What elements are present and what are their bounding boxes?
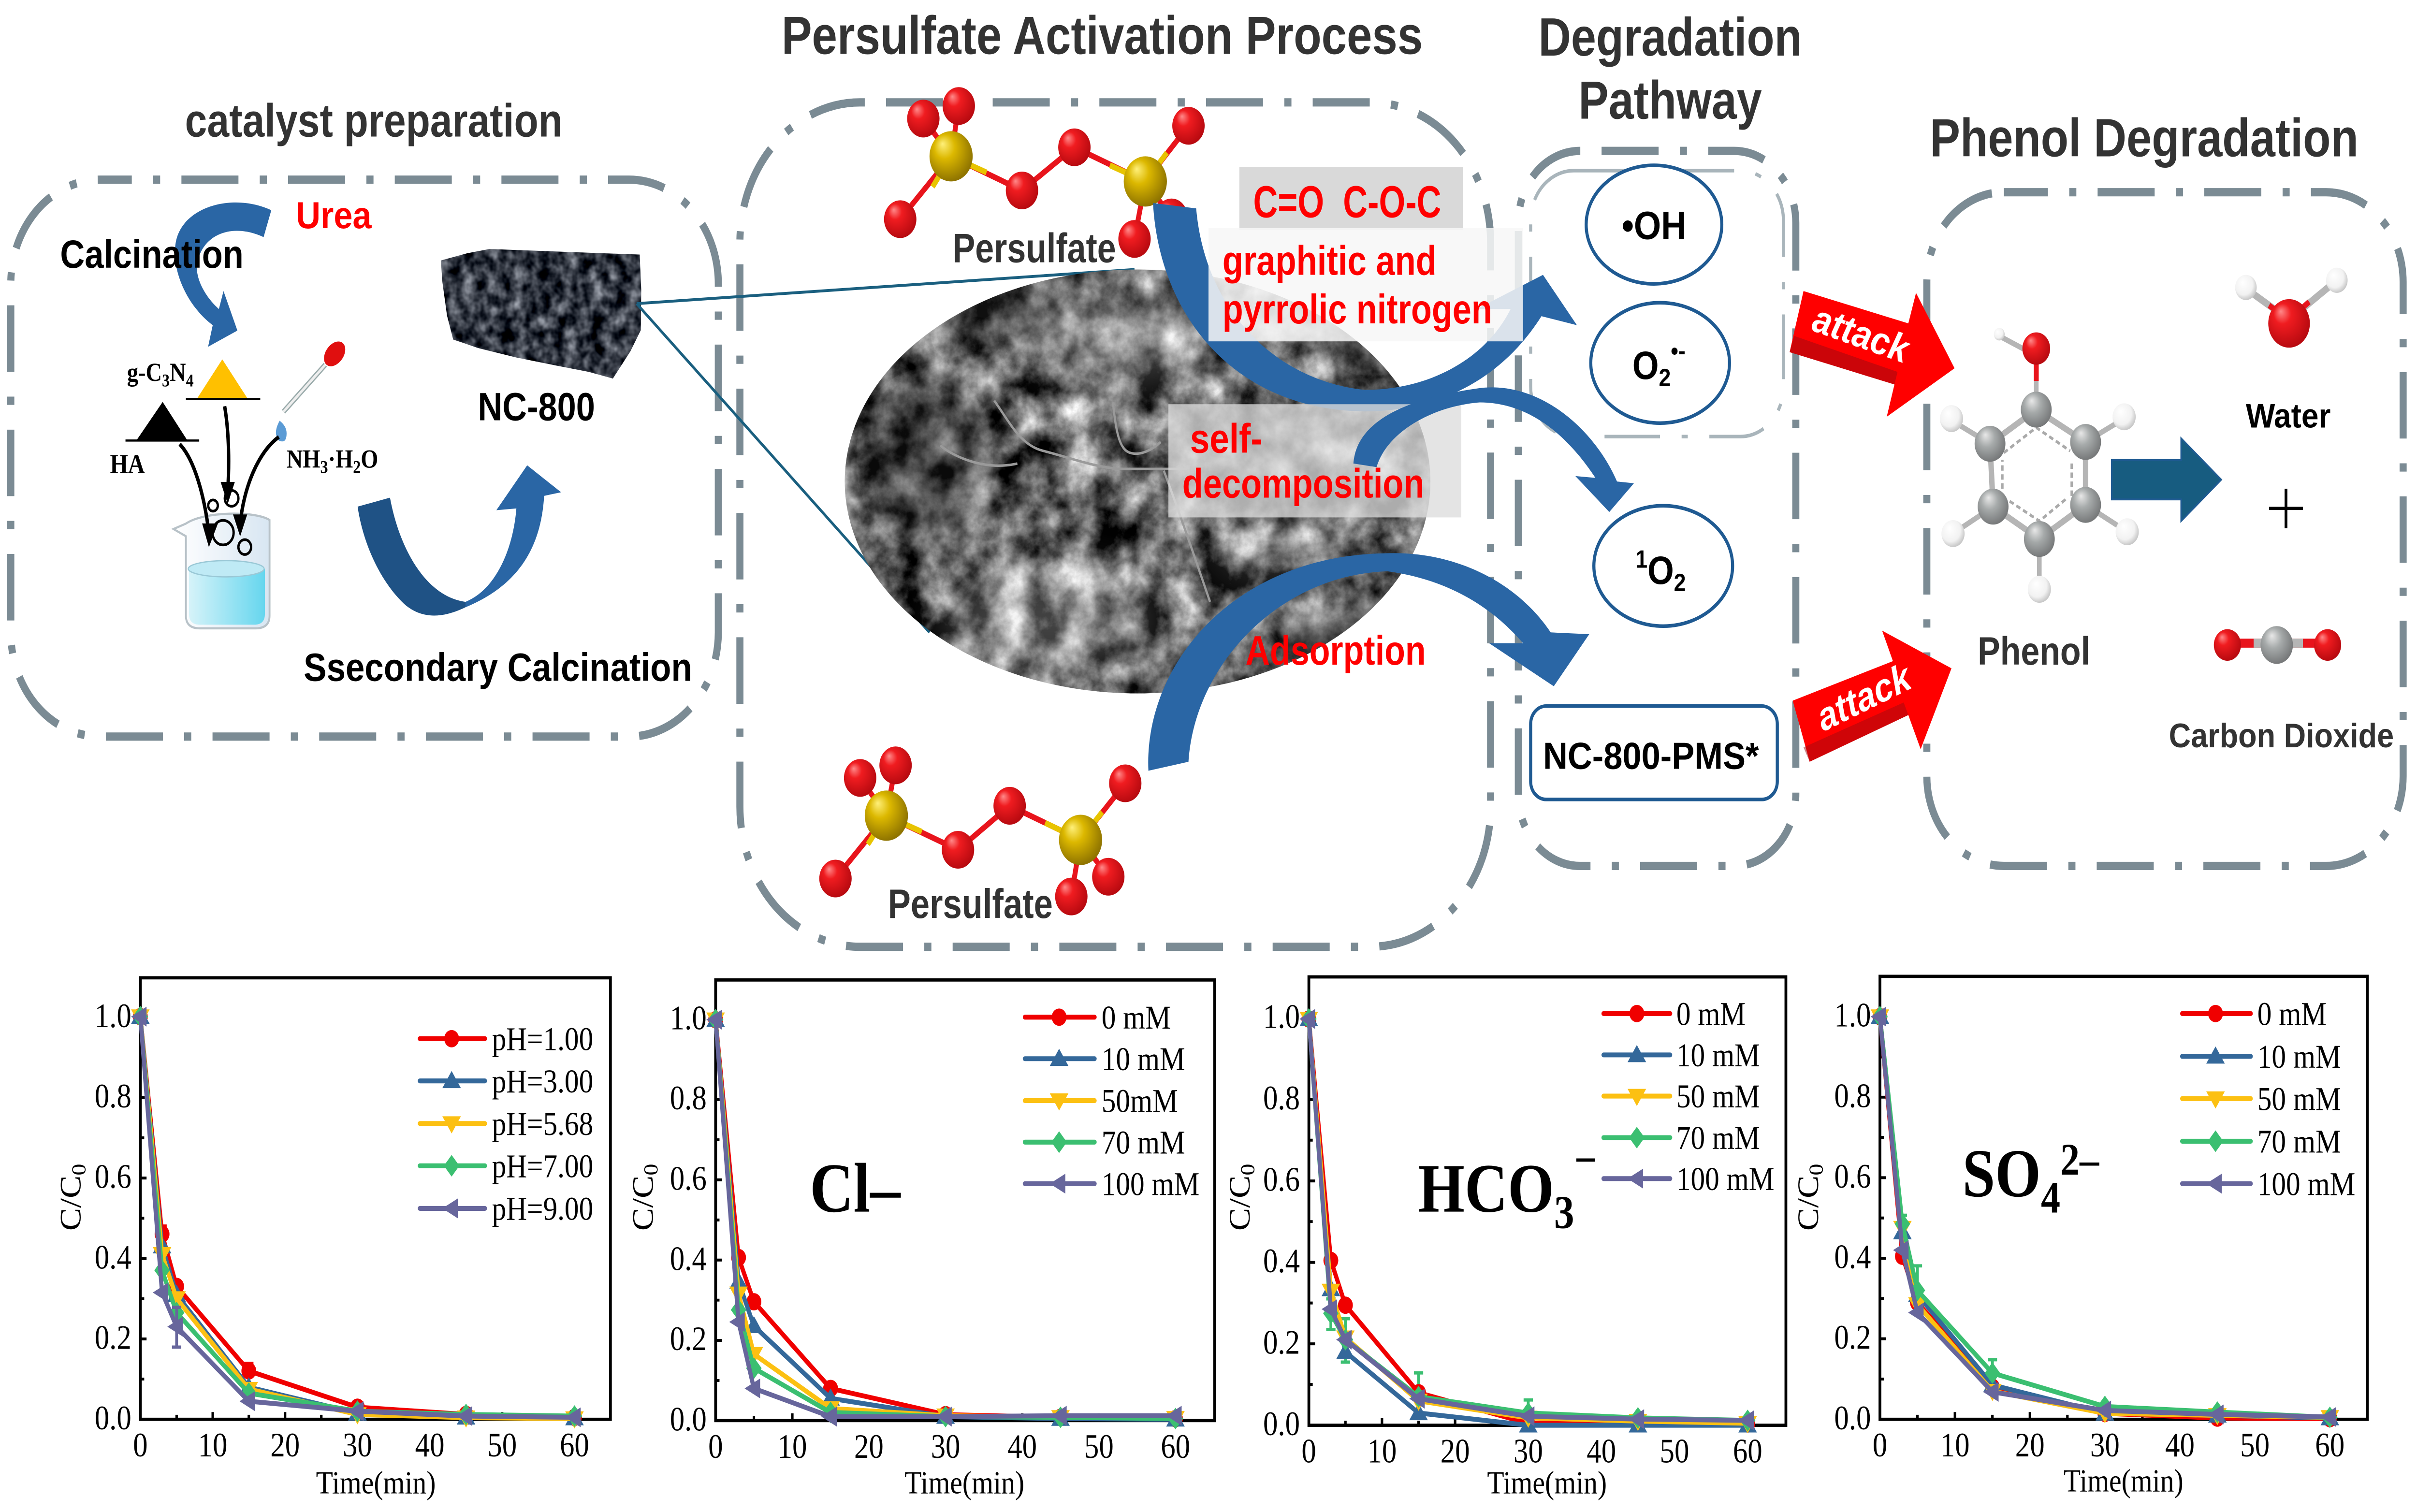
x tick labels: 10 bbox=[1367, 1432, 1397, 1470]
chart: HCO3- effect bbox=[1223, 977, 1786, 1500]
x axis title: Time(min) bbox=[316, 1464, 436, 1500]
x tick labels bbox=[133, 1426, 589, 1464]
chart: Cl- effect bbox=[627, 980, 1215, 1500]
chart: SO4 2- effect bbox=[1792, 976, 2367, 1499]
y tick labels: 0.8 bbox=[670, 1079, 707, 1117]
label: NC-800: NC-800 bbox=[478, 385, 595, 429]
y tick labels: 0.0 bbox=[1834, 1399, 1871, 1437]
label: g-C3N4: 3 bbox=[162, 370, 170, 391]
y axis title: C/C bbox=[1792, 1176, 1825, 1231]
x tick labels: 20 bbox=[270, 1426, 300, 1464]
legend: 100 mM bbox=[2257, 1165, 2355, 1202]
legend: 50mM bbox=[1102, 1082, 1178, 1119]
y axis title: C/C bbox=[55, 1176, 87, 1231]
species: singlet oxygen: 2 bbox=[1674, 569, 1686, 597]
label box: self-decomposition background bbox=[1168, 404, 1461, 517]
label: Calcination: Calcination bbox=[60, 233, 244, 276]
annotation: SO4 2-: 4 bbox=[2041, 1172, 2060, 1222]
y tick labels: 0.2 bbox=[1834, 1319, 1871, 1356]
arrow: attack top: attack bbox=[1808, 296, 1915, 372]
x tick labels: 40 bbox=[1587, 1432, 1616, 1470]
y axis title: C/C bbox=[1223, 1176, 1256, 1231]
frame and ticks bbox=[1880, 976, 2367, 1419]
y axis title: 0 bbox=[640, 1163, 662, 1176]
x tick labels bbox=[1873, 1426, 2344, 1464]
legend: pH=1.00 bbox=[492, 1020, 593, 1057]
legend: 70 mM bbox=[1676, 1119, 1760, 1156]
y tick labels bbox=[1834, 996, 1871, 1437]
arrow: secondary calcination bbox=[358, 465, 561, 615]
arrow: attack top bbox=[1790, 291, 1954, 417]
y tick labels: 0.4 bbox=[670, 1240, 707, 1278]
y tick labels: 0.0 bbox=[1263, 1405, 1300, 1443]
panel: catalyst preparation bbox=[11, 180, 718, 737]
frame and ticks bbox=[140, 978, 611, 1419]
label box: graphitic and pyrrolic nitrogen bbox=[1208, 228, 1523, 341]
x tick labels: 20 bbox=[2015, 1426, 2045, 1464]
x tick labels: 0 bbox=[708, 1428, 723, 1466]
series: Cl- lines bbox=[715, 1020, 1176, 1419]
x tick labels: 30 bbox=[1514, 1432, 1543, 1470]
icon: beaker bbox=[174, 514, 270, 628]
x tick labels: 10 bbox=[778, 1428, 807, 1466]
y tick labels bbox=[1263, 998, 1300, 1443]
heading: persulfate activation process: Persulfate Activation Process bbox=[782, 6, 1423, 66]
y tick labels: 0.4 bbox=[95, 1238, 131, 1276]
y tick labels: 0.2 bbox=[1263, 1323, 1300, 1362]
frame and ticks bbox=[715, 980, 1215, 1421]
x tick labels: 0 bbox=[133, 1426, 148, 1464]
y tick labels: 0.0 bbox=[95, 1399, 131, 1437]
heading: degradation pathway: Pathway bbox=[1578, 70, 1762, 131]
panel: phenol degradation bbox=[1927, 192, 2403, 866]
series: SO4 lines bbox=[1880, 1017, 2330, 1419]
x tick labels: 10 bbox=[1940, 1426, 1970, 1464]
species: superoxide radical: •- bbox=[1671, 337, 1686, 365]
y tick labels: 0.2 bbox=[95, 1319, 131, 1357]
x tick labels: 40 bbox=[415, 1426, 445, 1464]
species: NC-800-PMS* bbox=[1530, 706, 1777, 800]
label: NH3.H2O: NH bbox=[287, 444, 320, 473]
species: superoxide radical bbox=[1591, 303, 1730, 423]
legend: 0 mM bbox=[2257, 995, 2327, 1032]
legend: 10 mM bbox=[2257, 1038, 2341, 1075]
x tick labels bbox=[708, 1428, 1190, 1466]
label: NH3.H2O: 2 bbox=[353, 457, 361, 477]
icon: g-C3N4 triangle bbox=[186, 359, 260, 399]
annotation: Cl-: Cl– bbox=[810, 1149, 901, 1227]
label: HA: HA bbox=[110, 449, 145, 480]
legend: pH=5.68 bbox=[492, 1105, 593, 1142]
x tick labels: 50 bbox=[487, 1426, 517, 1464]
y tick labels: 0.6 bbox=[670, 1160, 707, 1198]
species: singlet oxygen: 1 bbox=[1635, 545, 1647, 573]
species: hydroxyl radical bbox=[1586, 165, 1722, 284]
x axis title: Time(min) bbox=[2064, 1463, 2184, 1499]
label: g-C3N4: N bbox=[170, 358, 186, 387]
label: self-decomposition: self- bbox=[1190, 415, 1263, 462]
x axis title: Time(min) bbox=[1487, 1464, 1607, 1500]
y tick labels: 0.6 bbox=[95, 1158, 131, 1196]
legend: 10 mM bbox=[1676, 1037, 1760, 1074]
legend: 0 mM bbox=[1676, 995, 1746, 1032]
x tick labels: 50 bbox=[1660, 1432, 1689, 1470]
symbol: plus bbox=[2269, 489, 2303, 528]
callout lines: zoom to SEM bbox=[637, 270, 1135, 632]
panel: degradation pathway bbox=[1518, 151, 1796, 866]
species: superoxide radical: 2 bbox=[1659, 364, 1671, 392]
arrow: self decomposition to singlet oxygen bbox=[1354, 387, 1634, 512]
label: Water: Water bbox=[2246, 396, 2330, 435]
y axis title: 0 bbox=[1237, 1163, 1259, 1176]
species: hydroxyl radical: •OH bbox=[1622, 204, 1687, 248]
arrow: attack bottom: attack bbox=[1811, 654, 1918, 740]
molecule: persulfate top bbox=[884, 87, 1205, 258]
annotation: HCO3-: 3 bbox=[1554, 1186, 1574, 1238]
heading: degradation pathway bbox=[1538, 7, 1802, 131]
x tick labels: 40 bbox=[2165, 1426, 2195, 1464]
x tick labels: 0 bbox=[1873, 1426, 1887, 1464]
error bars bbox=[1898, 1215, 1997, 1387]
y axis title: C/C bbox=[627, 1176, 659, 1231]
x tick labels: 20 bbox=[1441, 1432, 1470, 1470]
x tick labels: 30 bbox=[343, 1426, 372, 1464]
annotation: SO4 2-: SO bbox=[1963, 1135, 2041, 1211]
legend bbox=[420, 1020, 593, 1227]
heading: phenol degradation: Phenol Degradation bbox=[1930, 108, 2359, 168]
y axis title: 0 bbox=[1805, 1163, 1827, 1176]
y tick labels bbox=[95, 997, 131, 1437]
legend: 0 mM bbox=[1102, 999, 1171, 1036]
x tick labels: 60 bbox=[1733, 1432, 1762, 1470]
label: Persulfate bottom: Persulfate bbox=[888, 881, 1053, 927]
species: NC-800-PMS*: NC-800-PMS* bbox=[1543, 735, 1759, 777]
legend: pH=7.00 bbox=[492, 1148, 593, 1185]
legend: 10 mM bbox=[1102, 1041, 1185, 1077]
molecule: carbon dioxide bbox=[2214, 626, 2341, 664]
y tick labels: 0.8 bbox=[95, 1077, 131, 1115]
icon: porous carbon block NC-800 bbox=[441, 249, 641, 378]
x tick labels: 60 bbox=[1161, 1428, 1190, 1466]
annotation: SO4 2-: 2– bbox=[2060, 1134, 2100, 1184]
annotation: HCO3-: HCO bbox=[1418, 1150, 1554, 1227]
arrow: urea to g-C3N4 bbox=[175, 203, 271, 347]
label: self-decomposition bbox=[1182, 415, 1424, 507]
label: self-decomposition: decomposition bbox=[1182, 460, 1424, 507]
arrow: adsorption bbox=[1148, 553, 1589, 771]
icon: bubbles bbox=[208, 491, 251, 554]
legend: 70 mM bbox=[1102, 1124, 1185, 1161]
label: Carbon Dioxide: Carbon Dioxide bbox=[2169, 716, 2394, 755]
icon: dropper bbox=[276, 336, 349, 441]
y axis title: 0 bbox=[67, 1163, 89, 1176]
annotation: HCO3-: − bbox=[1574, 1134, 1597, 1186]
panel: persulfate activation bbox=[740, 102, 1491, 947]
x tick labels bbox=[1301, 1432, 1762, 1470]
legend bbox=[1603, 995, 1774, 1197]
molecule: phenol bbox=[1940, 328, 2139, 603]
x tick labels: 50 bbox=[1084, 1428, 1114, 1466]
y tick labels: 0.4 bbox=[1834, 1238, 1871, 1276]
y tick labels: 1.0 bbox=[1834, 996, 1871, 1034]
label: Adsorption: Adsorption bbox=[1246, 627, 1426, 673]
error bars bbox=[158, 1226, 253, 1380]
y tick labels: 1.0 bbox=[1263, 998, 1300, 1036]
label: Persulfate top: Persulfate bbox=[953, 225, 1116, 271]
arrows: reagents into beaker bbox=[180, 406, 279, 542]
legend: pH=3.00 bbox=[492, 1063, 593, 1100]
label: g-C3N4: g-C bbox=[127, 358, 162, 387]
image: SEM micrograph ellipse bbox=[844, 270, 1441, 694]
series: HCO3- lines bbox=[1309, 1019, 1747, 1425]
molecule: persulfate bottom bbox=[819, 746, 1141, 916]
series: pH lines bbox=[140, 1017, 574, 1419]
y tick labels: 0.8 bbox=[1263, 1079, 1300, 1117]
x tick labels: 50 bbox=[2240, 1426, 2270, 1464]
label box: graphitic and pyrrolic nitrogen: pyrrolic nitrogen bbox=[1223, 286, 1492, 332]
label: NH3.H2O: O bbox=[361, 444, 378, 473]
legend: 50 mM bbox=[1676, 1078, 1760, 1115]
species: singlet oxygen bbox=[1594, 506, 1733, 626]
error bars bbox=[1326, 1299, 1533, 1420]
legend: 70 mM bbox=[2257, 1123, 2341, 1160]
arrow: attack bottom bbox=[1793, 631, 1951, 762]
x tick labels: 0 bbox=[1301, 1432, 1316, 1470]
y tick labels: 0.2 bbox=[670, 1320, 707, 1358]
heading: catalyst preparation: catalyst preparation bbox=[185, 95, 563, 147]
x tick labels: 20 bbox=[854, 1428, 884, 1466]
species: singlet oxygen: O bbox=[1647, 549, 1674, 593]
frame and ticks bbox=[1309, 977, 1786, 1425]
y tick labels: 1.0 bbox=[95, 997, 131, 1035]
legend: 100 mM bbox=[1102, 1165, 1199, 1202]
molecule: water bbox=[2235, 268, 2348, 348]
x tick labels: 10 bbox=[198, 1426, 227, 1464]
y tick labels: 0.0 bbox=[670, 1400, 707, 1439]
legend bbox=[2182, 995, 2355, 1202]
y tick labels bbox=[670, 999, 707, 1439]
arrow: persulfate to radicals bbox=[1153, 203, 1577, 411]
legend: pH=9.00 bbox=[492, 1190, 593, 1227]
arrow: phenol to products bbox=[2112, 438, 2221, 521]
icon: reagents and beaker bbox=[110, 336, 378, 628]
label box: C=O C-O-C: C=O C-O-C bbox=[1253, 177, 1441, 227]
x tick labels: 60 bbox=[2315, 1426, 2344, 1464]
x axis title: Time(min) bbox=[904, 1464, 1024, 1500]
species: superoxide radical: O bbox=[1632, 344, 1659, 388]
x tick labels: 60 bbox=[560, 1426, 589, 1464]
label: NH3.H2O: 3 bbox=[320, 457, 328, 477]
label: NH3.H2O: ·H bbox=[328, 444, 353, 473]
legend bbox=[1025, 999, 1199, 1202]
label box: graphitic and pyrrolic nitrogen: graphitic and bbox=[1223, 237, 1437, 284]
x tick labels: 40 bbox=[1007, 1428, 1037, 1466]
x tick labels: 30 bbox=[931, 1428, 960, 1466]
label: Urea: Urea bbox=[296, 194, 372, 236]
label: g-C3N4: 4 bbox=[186, 370, 194, 391]
y tick labels: 0.8 bbox=[1834, 1077, 1871, 1115]
y tick labels: 0.6 bbox=[1834, 1158, 1871, 1195]
icon: HA triangle bbox=[126, 402, 199, 440]
panel: degradation pathway inner radicals bbox=[1530, 171, 1783, 436]
heading: degradation pathway: Degradation bbox=[1538, 7, 1802, 68]
label: Ssecondary Calcination: Ssecondary Calcination bbox=[304, 646, 692, 690]
x tick labels: 30 bbox=[2090, 1426, 2120, 1464]
chart: pH effect bbox=[55, 978, 611, 1500]
legend: 100 mM bbox=[1676, 1161, 1774, 1197]
y tick labels: 1.0 bbox=[670, 999, 707, 1037]
legend: 50 mM bbox=[2257, 1080, 2341, 1117]
y tick labels: 0.6 bbox=[1263, 1161, 1300, 1199]
label: Phenol: Phenol bbox=[1978, 629, 2090, 673]
y tick labels: 0.4 bbox=[1263, 1242, 1300, 1280]
